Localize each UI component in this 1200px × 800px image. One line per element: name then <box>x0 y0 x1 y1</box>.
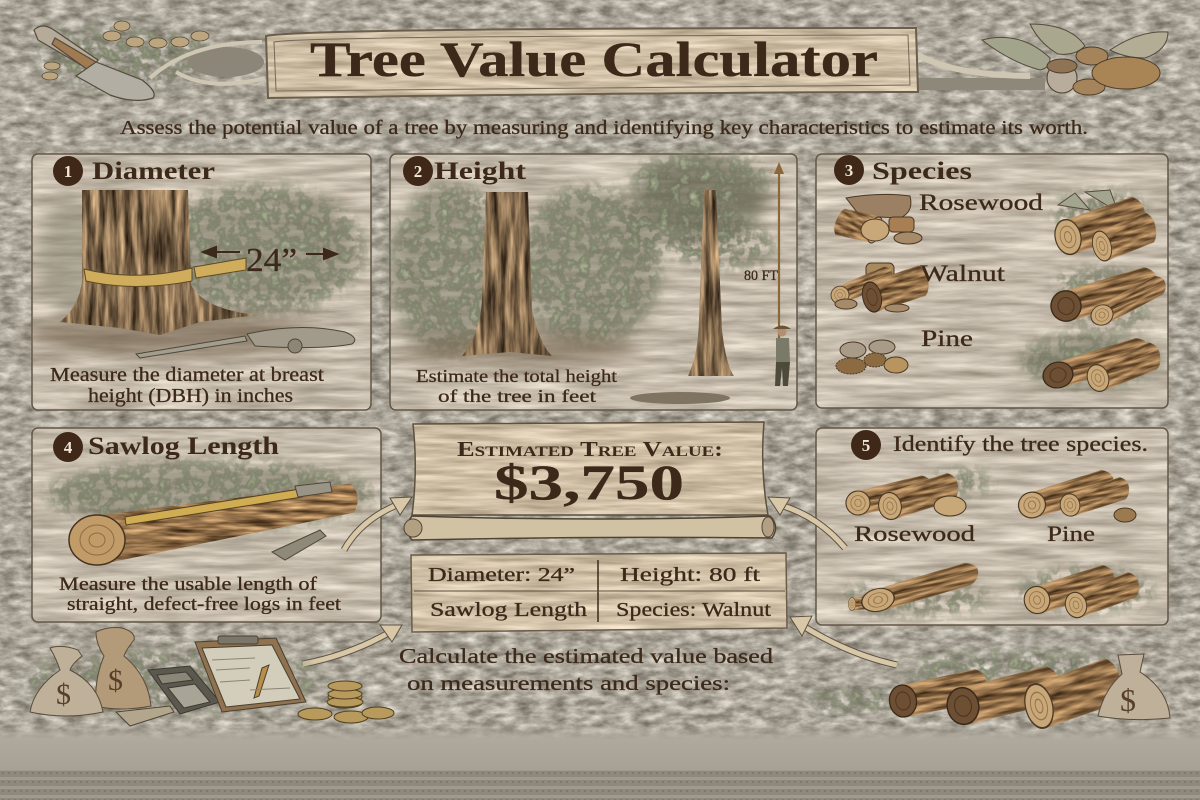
top-left garden decoration <box>34 21 265 100</box>
description: Estimate the total height <box>416 366 617 386</box>
log one <box>887 668 989 719</box>
rosewood label: Rosewood <box>919 190 1044 215</box>
log three <box>1019 657 1127 731</box>
panel: sawlog length: straight, defect-free logs in feet <box>67 594 342 615</box>
hand tool <box>272 530 326 560</box>
lower right logs <box>1015 563 1155 620</box>
panel: identify species <box>816 428 1168 625</box>
walnut label: Walnut <box>920 261 1006 286</box>
forest backdrop <box>390 185 660 368</box>
heading: Diameter <box>92 158 215 185</box>
rosewood pile <box>832 194 922 249</box>
fallen tools <box>630 392 730 404</box>
heading: Height <box>434 158 527 185</box>
arrow: species to value <box>768 497 845 548</box>
tall tree trunk <box>688 190 734 376</box>
pencil lines on page <box>212 658 290 690</box>
tree trunk <box>60 190 258 335</box>
arrow: sawlog to value <box>344 497 412 550</box>
value: $3,750 <box>494 454 684 510</box>
subtitle: Assess the potential value of a tree by measuring and identifying key characteristics to estimate its worth. <box>120 117 1088 139</box>
log two <box>943 665 1064 727</box>
calculation note <box>399 644 774 695</box>
money bag rear <box>96 628 151 709</box>
step badge 3: 3 <box>845 161 853 180</box>
oak leaves <box>982 24 1168 70</box>
step badge 5 <box>851 430 881 460</box>
money bag front <box>30 646 103 716</box>
diameter cell: Diameter: 24” <box>428 564 575 586</box>
rosewood label: Rosewood <box>854 521 975 546</box>
money bag front: $ <box>56 678 71 711</box>
step badge 4: 4 <box>64 438 73 457</box>
ribbon <box>915 78 1045 90</box>
loose cash <box>116 706 174 726</box>
money bag rear: $ <box>108 664 123 697</box>
left curl <box>404 519 422 537</box>
woven bottom band <box>0 724 1200 800</box>
pine cones and nuts <box>836 340 908 374</box>
bottom-right logs and money bag <box>805 652 1170 731</box>
pine right logs <box>1020 334 1165 394</box>
step badge 2 <box>403 156 433 186</box>
trowel <box>34 26 154 100</box>
yellow tape <box>125 489 302 525</box>
title banner <box>266 28 918 98</box>
height line <box>774 162 784 385</box>
acorns <box>1047 47 1160 95</box>
title: Tree Value Calculator <box>310 31 878 87</box>
foliage <box>900 652 1140 688</box>
pine label: Pine <box>921 326 973 351</box>
panel: diameter: height (DBH) in inches <box>88 385 293 407</box>
background foliage <box>40 185 365 315</box>
species cell: Species: Walnut <box>616 599 772 621</box>
step badge 1: 1 <box>64 162 72 181</box>
panel: height <box>390 152 797 410</box>
autumn leaves <box>42 21 209 80</box>
panel: height: of the tree in feet <box>438 386 596 406</box>
pine label: Pine <box>1047 521 1095 546</box>
heading: Identify the tree species. <box>893 431 1148 456</box>
pine logs <box>1015 468 1136 522</box>
money bag: $ <box>1120 682 1136 718</box>
person <box>773 326 791 386</box>
lower left logs <box>840 561 990 616</box>
rosewood logs <box>843 468 990 522</box>
description: Measure the diameter at breast <box>50 364 324 386</box>
ribbon <box>150 42 265 84</box>
sawlog <box>97 484 357 564</box>
bottom-left money and tools <box>20 628 394 726</box>
caliper tool <box>136 327 355 358</box>
description: Measure the usable length of <box>59 574 318 595</box>
height cell: Height: 80 ft <box>620 564 761 586</box>
scroll: estimated value <box>404 422 776 540</box>
step badge 3 <box>834 155 864 185</box>
money bag <box>1098 654 1170 720</box>
panel: sawlog length <box>32 428 381 622</box>
tall tree canopy <box>623 152 775 269</box>
label: Estimated Tree Value: <box>457 437 723 461</box>
height value: 80 FT <box>744 268 778 284</box>
calculation note: on measurements and species: <box>407 671 730 695</box>
foreground trunk <box>462 192 552 356</box>
measurement summary table <box>411 553 787 632</box>
arrow: logs to table <box>790 616 897 665</box>
heading: Sawlog Length <box>88 433 279 460</box>
foliage <box>35 26 215 90</box>
walnut right logs <box>1047 265 1170 329</box>
step badge 5: 5 <box>862 436 870 455</box>
clipboard <box>195 636 306 712</box>
ground <box>25 313 325 357</box>
sawlog cell: Sawlog Length <box>430 599 587 621</box>
rosewood right logs <box>1050 190 1161 263</box>
step badge 4 <box>53 432 83 462</box>
panel: species <box>816 154 1170 408</box>
top-right acorn decoration <box>915 24 1168 95</box>
measuring tape <box>84 258 246 286</box>
right curl <box>762 517 774 537</box>
shadow foliage <box>20 650 320 710</box>
calculator <box>148 666 220 714</box>
calculation note: Calculate the estimated value based <box>399 644 774 668</box>
gold coins <box>298 681 394 723</box>
log end <box>69 515 125 565</box>
arrow: tools to table <box>303 625 402 664</box>
dimension label: 24” <box>246 242 297 279</box>
dimension arrows <box>203 247 337 259</box>
background foliage <box>45 461 375 529</box>
step badge 1 <box>53 156 83 186</box>
scroll roll <box>407 516 776 540</box>
step badge 2: 2 <box>414 162 422 181</box>
tape case <box>295 482 332 497</box>
walnut pile <box>828 263 932 314</box>
heading: Species <box>872 158 972 185</box>
panel: diameter <box>25 154 371 410</box>
